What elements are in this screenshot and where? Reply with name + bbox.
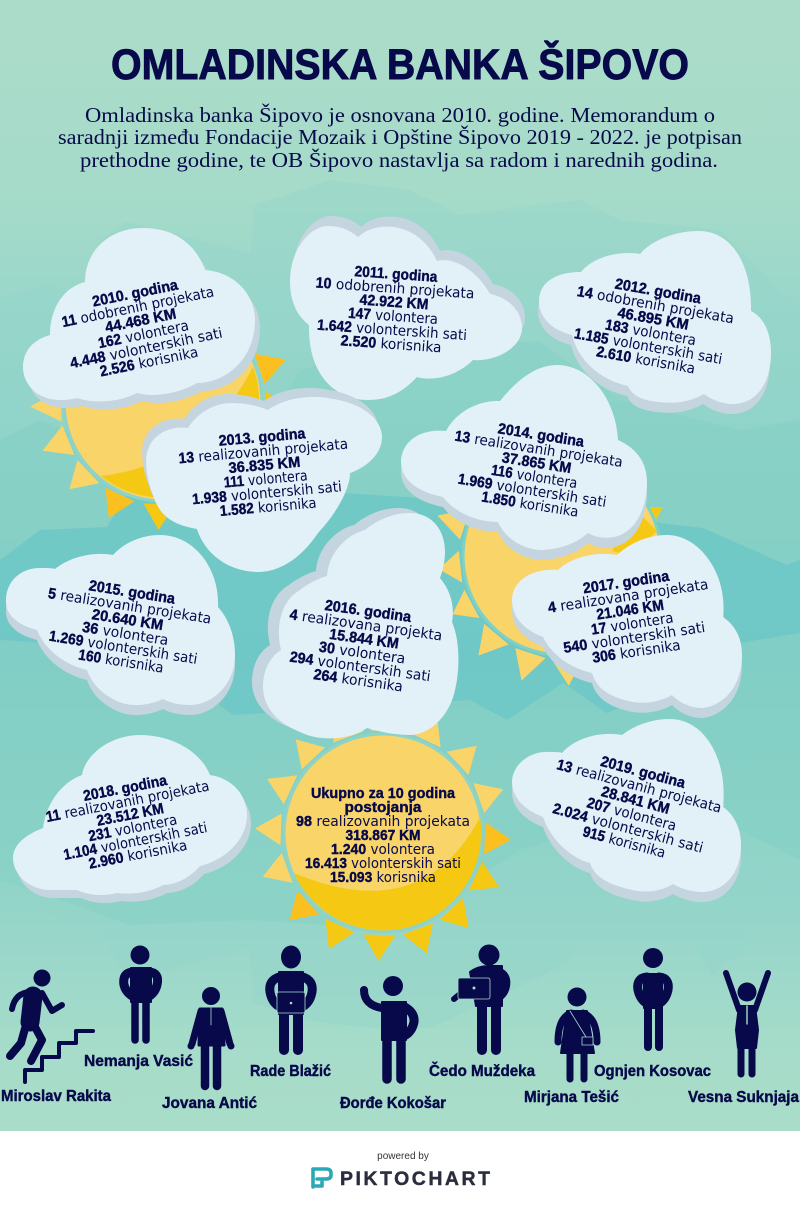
person: Đorđe Kokošar xyxy=(364,976,414,1079)
cloud: 2016 xyxy=(252,508,458,738)
cloud: 2019: 207 volontera xyxy=(585,794,678,835)
cloud: 2012: 183 volontera xyxy=(604,316,697,349)
cloud: 2012: 2012. godina xyxy=(614,276,703,308)
cloud: 2018: 23.512 KM xyxy=(95,800,165,830)
cloud: 2016: 15.844 KM xyxy=(328,626,400,653)
cloud: 2012: 1.185 volonterskih sati xyxy=(573,325,724,368)
cloud: 2010: 2010. godina xyxy=(91,276,180,310)
sun: upper left xyxy=(30,303,292,530)
intro paragraph: saradnji između Fondacije Mozaik i Opštine Šipovo 2019 - 2022. je potpisan xyxy=(58,125,743,149)
person names: Đorđe Kokošar xyxy=(340,1095,446,1112)
cloud: 2013 xyxy=(142,388,382,572)
total text: postojanja xyxy=(344,799,422,816)
person: Vesna Suknjaja xyxy=(726,973,768,1074)
cloud: 2015: 2015. godina xyxy=(88,577,177,608)
total text: Ukupno za 10 godina xyxy=(311,785,456,802)
cloud: 2011: 42.922 KM xyxy=(359,292,429,313)
cloud: 2013: 36.835 KM xyxy=(228,454,301,477)
cloud: 2017: 2017. godina xyxy=(582,568,671,597)
total text: 318.867 KM xyxy=(346,827,420,844)
footer xyxy=(0,1131,800,1211)
icon: piktochart logo xyxy=(313,1169,331,1187)
intro paragraph xyxy=(58,103,743,172)
cloud: 2013: 2013. godina xyxy=(218,425,307,450)
cloud: 2010: 4.448 volonterskih sati xyxy=(69,325,224,372)
cloud: 2018: 1.104 volonterskih sati xyxy=(62,819,209,864)
footer: PIKTOCHART xyxy=(340,1168,490,1190)
cloud: 2013: 13 realizovanih projekata xyxy=(178,436,349,467)
cloud: 2013: 1.582 korisnika xyxy=(219,495,317,520)
cloud: 2010: 11 odobrenih projekata xyxy=(60,283,216,331)
cloud: 2011: 1.642 volonterskih sati xyxy=(317,317,467,344)
cloud: 2015: 160 korisnika xyxy=(77,647,165,677)
cloud: 2016: 4 realizovana projekta xyxy=(289,606,443,644)
person: Ognjen Kosovac xyxy=(638,948,668,1047)
total text xyxy=(296,785,470,886)
cloud: 2010: 44.468 KM xyxy=(104,305,178,336)
person names: Jovana Antić xyxy=(162,1095,257,1112)
sun: total for 10 years xyxy=(255,705,512,961)
cloud: 2018: 2018. godina xyxy=(82,772,169,805)
cloud: 2013: 111 volontera xyxy=(223,467,308,491)
cloud: 2017: 4 realizovana projekata xyxy=(547,576,710,617)
cloud: 2018: 2.960 korisnika xyxy=(87,837,189,873)
cloud: 2019: 2019. godina xyxy=(599,753,688,792)
person: Miroslav Rakita xyxy=(10,970,93,1082)
cloud: 2017: 17 volontera xyxy=(590,609,675,639)
cloud: 2014: 13 realizovanih projekata xyxy=(453,428,624,471)
cloud: 2014 xyxy=(401,365,647,560)
cloud: 2019: 915 korisnika xyxy=(581,823,667,862)
cloud: 2018: 11 realizovanih projekata xyxy=(45,778,211,826)
cloud: 2011: 2.520 korisnika xyxy=(340,332,442,356)
cloud: 2017: 21.046 KM xyxy=(595,597,665,624)
person: Čedo Muždeka xyxy=(454,944,506,1050)
person: Rade Blažić xyxy=(270,946,312,1050)
person names: Vesna Suknjaja xyxy=(688,1089,799,1106)
cloud: 2010: 2.526 korisnika xyxy=(98,344,200,380)
intro paragraph: Omladinska banka Šipovo je osnovana 2010. godine. Memorandum o xyxy=(85,103,715,127)
person: Mirjana Tešić xyxy=(558,988,597,1079)
person names: Nemanja Vasić xyxy=(84,1053,193,1070)
cloud: 2011 xyxy=(290,216,525,400)
cloud: 2015: 5 realizovanih projekata xyxy=(47,585,213,628)
cloud: 2015 xyxy=(6,535,235,715)
cloud: 2010 xyxy=(23,228,260,409)
total text: 1.240 volontera xyxy=(331,841,435,858)
cloud: 2014: 1.969 volonterskih sati xyxy=(457,471,608,511)
person: Nemanja Vasić xyxy=(124,946,158,1040)
cloud: 2016: 264 korisnika xyxy=(312,666,404,695)
intro paragraph: prethodne godine, te OB Šipovo nastavlja sa radom i narednih godina. xyxy=(80,148,718,172)
cloud: 2019: 2.024 volonterskih sati xyxy=(551,800,705,857)
cloud: 2014: 116 volontera xyxy=(490,462,579,492)
person names: Miroslav Rakita xyxy=(1,1088,111,1105)
cloud: 2015: 36 volontera xyxy=(81,619,170,649)
cloud: 2016: 294 volonterskih sati xyxy=(289,649,432,685)
cloud: 2011: 147 volontera xyxy=(348,305,439,328)
cloud: 2017: 540 volonterskih sati xyxy=(562,619,706,657)
total text: 15.093 korisnika xyxy=(330,869,436,886)
total text: 16.413 volonterskih sati xyxy=(305,855,461,872)
cloud: 2012: 46.895 KM xyxy=(616,304,690,334)
person names xyxy=(1,1053,799,1112)
cloud: 2016: 30 volontera xyxy=(318,639,406,668)
cloud: 2012 xyxy=(538,231,771,414)
cloud: 2018 xyxy=(13,735,251,903)
cloud: 2010: 162 volontera xyxy=(97,317,190,352)
sun: middle right xyxy=(432,457,663,687)
cloud: 2016: 2016. godina xyxy=(324,597,413,626)
cloud: 2019 xyxy=(512,719,741,902)
person names: Ognjen Kosovac xyxy=(594,1063,711,1080)
total text: 98 realizovanih projekata xyxy=(296,813,470,830)
cloud: 2011: 10 odobrenih projekata xyxy=(315,274,475,302)
cloud: 2014: 37.865 KM xyxy=(501,449,572,477)
cloud: 2018: 231 volontera xyxy=(87,811,179,845)
cloud: 2011: 2011. godina xyxy=(354,263,439,286)
person: Jovana Antić xyxy=(188,987,234,1086)
cloud: 2017 xyxy=(512,535,742,718)
footer: powered by xyxy=(377,1151,429,1162)
cloud: 2017: 306 korisnika xyxy=(591,637,682,667)
cloud: 2014: 2014. godina xyxy=(497,420,586,451)
cloud: 2014: 1.850 korisnika xyxy=(480,489,580,521)
cloud: 2015: 20.640 KM xyxy=(91,606,164,634)
cloud: 2019: 13 realizovanih projekata xyxy=(555,756,723,817)
cloud: 2012: 2.610 korisnika xyxy=(595,343,696,377)
cloud: 2012: 14 odobrenih projekata xyxy=(576,283,735,327)
cloud: 2015: 1.269 volonterskih sati xyxy=(48,628,199,668)
person names: Mirjana Tešić xyxy=(524,1089,619,1106)
person names: Rade Blažić xyxy=(250,1063,331,1080)
title: OMLADINSKA BANKA ŠIPOVO xyxy=(111,40,689,89)
cloud: 2019: 28.841 KM xyxy=(599,783,671,818)
cloud: 2013: 1.938 volonterskih sati xyxy=(191,478,342,508)
person names: Čedo Muždeka xyxy=(429,1062,535,1080)
